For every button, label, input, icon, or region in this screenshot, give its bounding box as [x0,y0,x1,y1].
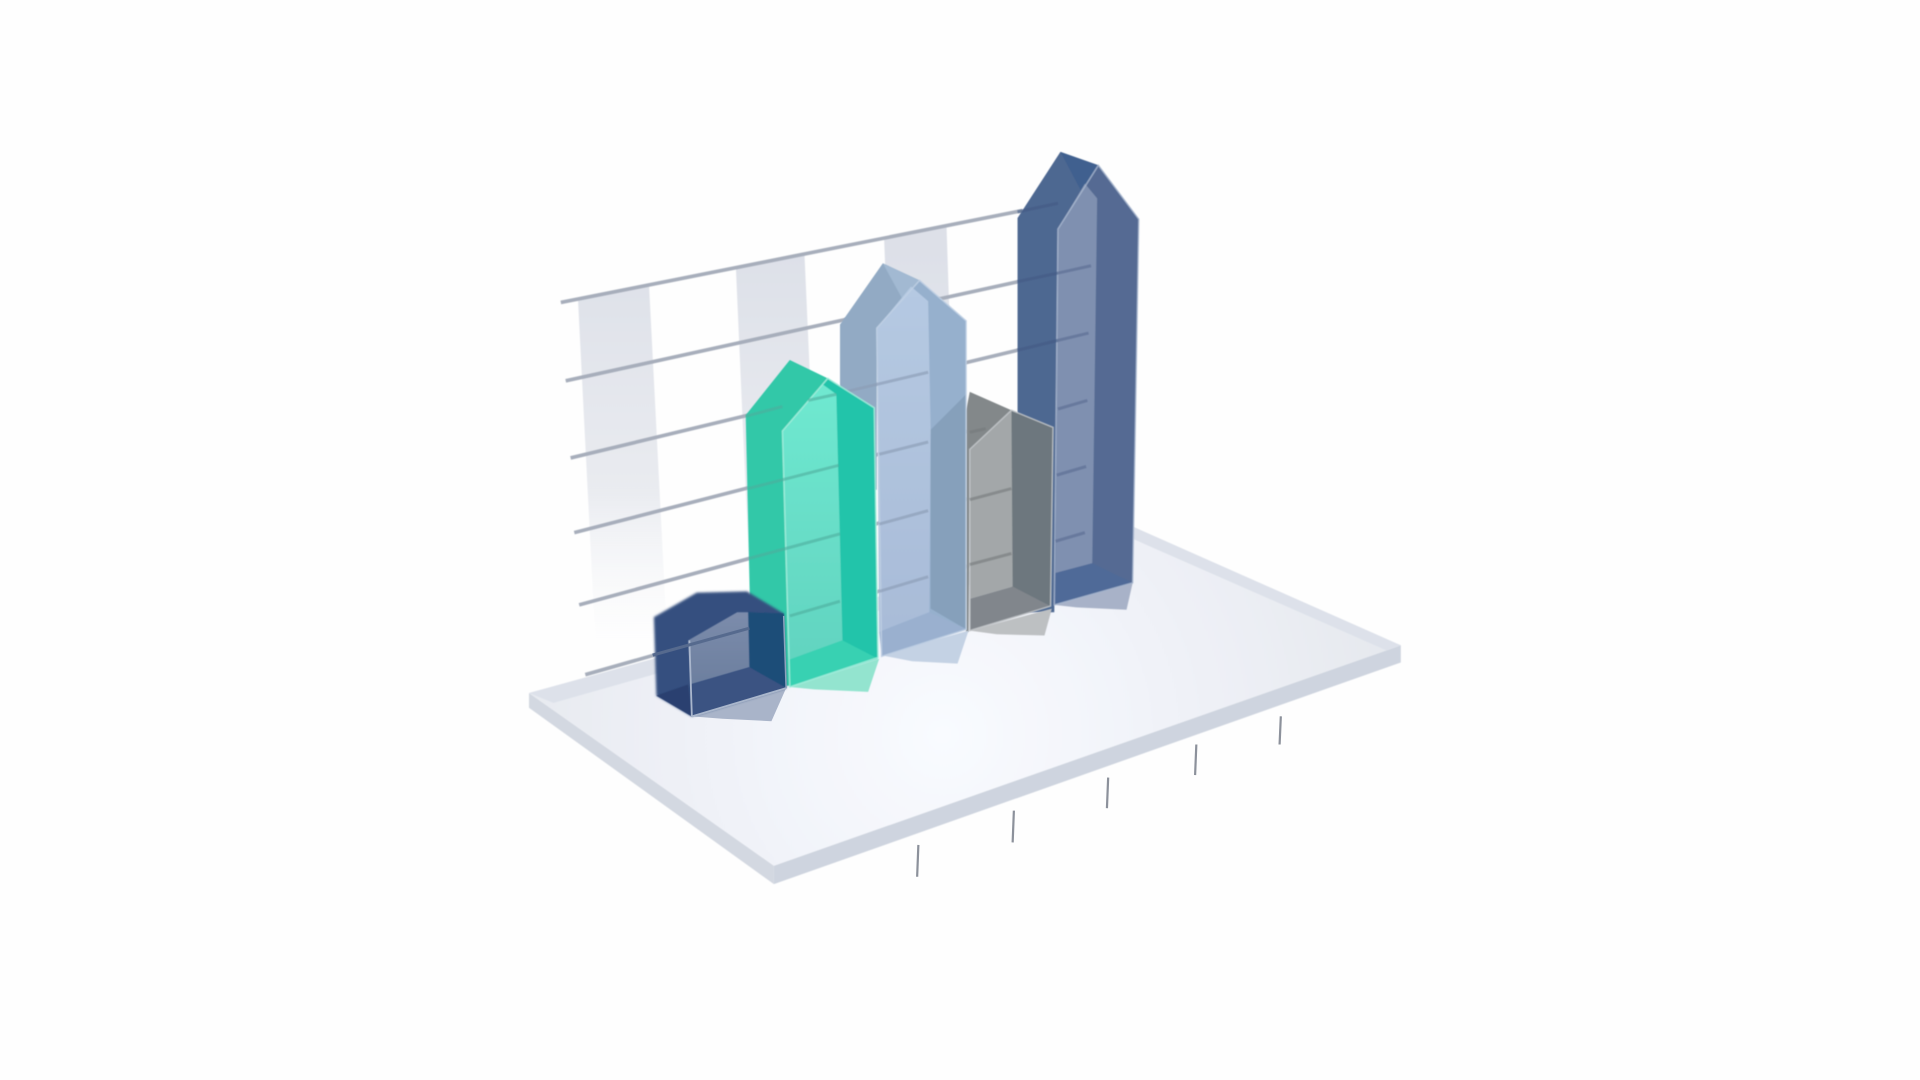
platform [529,527,1401,884]
bar: small navy [653,591,786,721]
bar: teal [746,360,879,692]
bar: light blue [840,263,969,664]
bar: grey [966,392,1053,636]
grid lines [561,211,1091,675]
wall stripes [578,227,955,661]
axis tick marks [917,716,1281,877]
bar: tall navy [1018,152,1139,612]
